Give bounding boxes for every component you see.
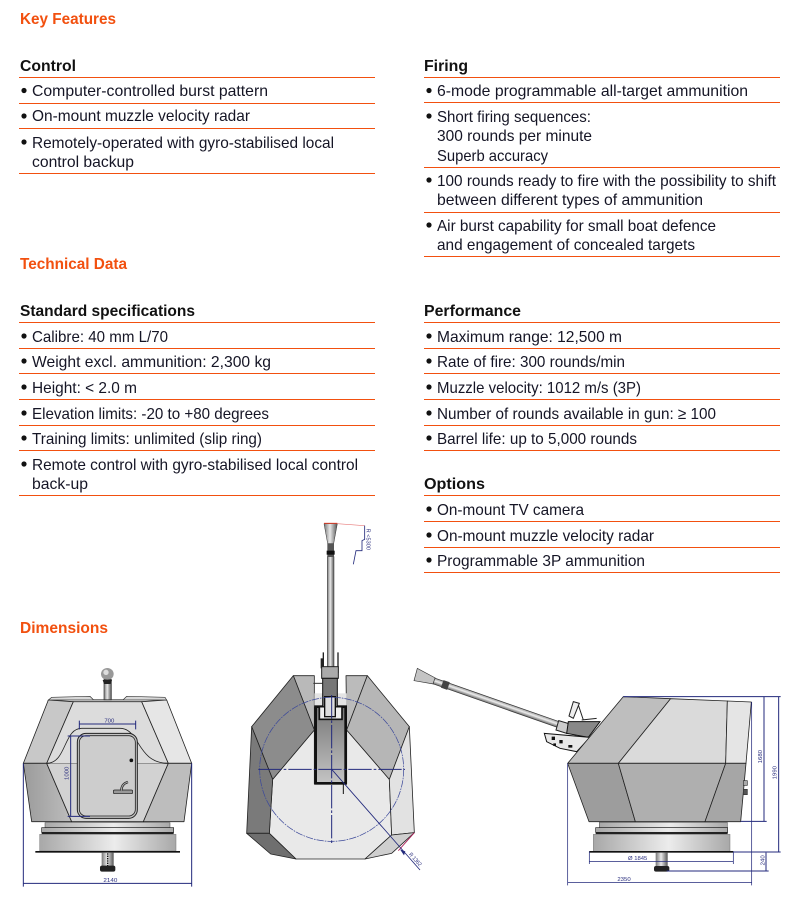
panel: Control: control backup [32,154,134,171]
drawing: top view of turret: R <5300 [365,529,371,550]
drawing: side view of turret with raised barrel: 2350 [617,877,631,883]
panel: Performance: Maximum range: 12,500 m [437,329,622,346]
panel: Firing: between different types of ammunition [437,192,703,209]
drawing: side view of turret with raised barrel: 240 [761,855,767,865]
drawing: side view of turret with raised barrel: Ø 1845 [628,856,647,862]
panel: Performance: Rate of fire: 300 rounds/min [437,354,625,371]
panel: Firing: 300 rounds per minute [437,128,592,145]
subheading: Control: Control [20,58,76,75]
panel: Standard specifications: Calibre: 40 mm L/70 [32,329,168,346]
panel: Performance: Barrel life: up to 5,000 rounds [437,431,637,448]
panel: Firing: Air burst capability for small boat defence [437,218,716,235]
panel: Options: On-mount TV camera [437,502,584,519]
drawing: rear view of turret: 1000 [64,767,70,780]
drawing: rear view of turret [23,668,192,887]
subheading: Firing: Firing [424,58,468,75]
panel: Options: Programmable 3P ammunition [437,553,645,570]
panel: Firing: Superb accuracy [437,148,548,165]
drawing: top view of turret [247,523,422,870]
panel: Standard specifications: Weight excl. ammunition: 2,300 kg [32,354,271,371]
panel: Control: On-mount muzzle velocity radar [32,108,251,125]
drawing: rear view of turret: 2140 [103,878,117,884]
panel: Performance: Number of rounds available in gun: ≥ 100 [437,406,716,423]
panel: Standard specifications: Elevation limits: -20 to +80 degrees [32,406,269,423]
drawing: rear view of turret: 700 [104,718,114,724]
panel: Options: On-mount muzzle velocity radar [437,528,655,545]
panel: Firing: 100 rounds ready to fire with the possibility to shift [437,173,777,190]
panel: Options [424,476,780,572]
heading: Key Features: Key Features [20,11,116,28]
panel: Standard specifications: back-up [32,476,88,493]
heading: Dimensions: Dimensions [20,620,108,637]
panel: Firing: and engagement of concealed targets [437,237,695,254]
panel: Performance [424,303,780,450]
panel: Control: Remotely-operated with gyro-stabilised local [32,135,334,152]
panel: Control: Computer-controlled burst pattern [32,83,268,100]
drawing: top view of turret: R 1362 [407,852,422,868]
panel: Control [19,58,375,174]
drawing: side view of turret with raised barrel: 1990 [773,766,779,779]
panel: Standard specifications: Remote control with gyro-stabilised local control [32,457,358,474]
panel: Performance: Muzzle velocity: 1012 m/s (3P) [437,380,641,397]
panel: Firing: Short firing sequences: [437,109,591,126]
panel: Firing: 6-mode programmable all-target ammunition [437,83,748,100]
panel: Standard specifications [19,303,375,496]
panel: Standard specifications: Height: < 2.0 m [32,380,137,397]
drawing: side view of turret with raised barrel [414,668,781,885]
drawing: side view of turret with raised barrel: 1680 [758,750,764,763]
subheading: Performance: Performance [424,303,521,320]
subheading: Options: Options [424,476,485,493]
heading: Technical Data: Technical Data [20,256,127,273]
panel: Standard specifications: Training limits: unlimited (slip ring) [32,431,262,448]
panel: Firing [424,58,780,256]
subheading: Standard specifications: Standard specifications [20,303,195,320]
